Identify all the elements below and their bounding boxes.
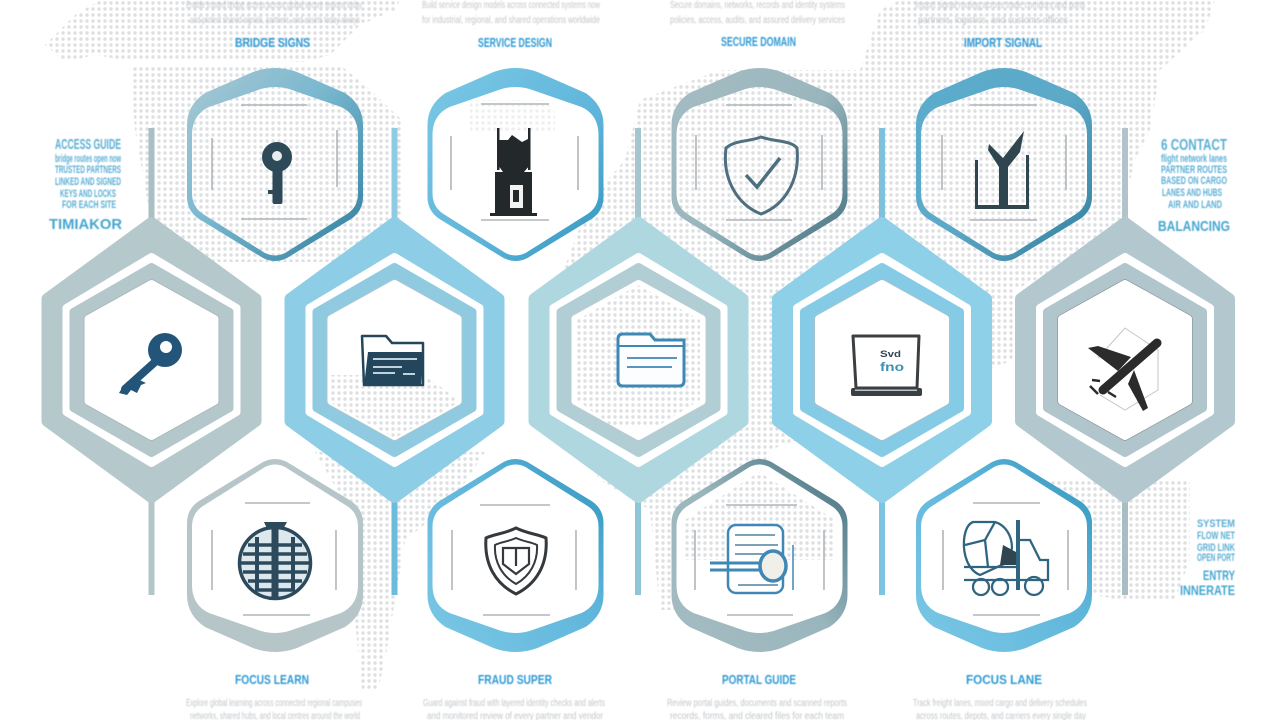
- right side text block: flight network lanes: [1161, 153, 1227, 165]
- icon: laptop: Svd: [880, 349, 901, 359]
- bottom headings: PORTAL GUIDE: [722, 672, 796, 687]
- panel: top hexagon 1 key: [187, 68, 363, 261]
- bottom headings: FOCUS LEARN: [235, 672, 309, 687]
- bottom description text columns: Track freight lanes, mixed cargo and delivery schedules: [913, 698, 1087, 709]
- left side text block: TIMIAKOR: [49, 216, 122, 233]
- panel: big hexagon 5 plane: [1021, 223, 1229, 497]
- bottom description text columns: Guard against fraud with layered identity checks and alerts: [423, 698, 605, 709]
- bottom headings: [235, 672, 1042, 687]
- right side text block: BASED ON CARGO: [1161, 175, 1227, 187]
- left side text block: ACCESS GUIDE: [55, 136, 121, 153]
- panel: bottom hexagon 2 shield: [428, 459, 604, 652]
- right side text block: AIR AND LAND: [1168, 199, 1222, 211]
- icon: globe: [240, 522, 310, 598]
- connector stems: [148, 128, 1128, 595]
- bottom right text block: ENTRY: [1203, 567, 1235, 583]
- panel: bottom hexagon 4 mixer truck: [916, 459, 1092, 652]
- left side text block: LINKED AND SIGNED: [55, 176, 121, 188]
- left side text block: FOR EACH SITE: [62, 199, 116, 211]
- right side text block: PARTNER ROUTES: [1161, 164, 1227, 176]
- panel: top hexagon 4 signal: [916, 68, 1092, 261]
- top description text columns: [186, 0, 1085, 26]
- icon: mixer truck: [964, 520, 1048, 595]
- top description text columns: for industrial, regional, and shared operations worldwide: [422, 15, 600, 26]
- left side text block: TRUSTED PARTNERS: [55, 164, 121, 176]
- icon: airplane: [1088, 328, 1158, 411]
- icon: shield with check: [725, 137, 797, 214]
- bottom right text block: FLOW NET: [1197, 530, 1235, 542]
- top description text columns: policies, access, audits, and assured delivery services: [670, 15, 845, 26]
- top headings: SERVICE DESIGN: [478, 35, 552, 50]
- icon: laptop: [851, 336, 922, 396]
- top headings: [235, 34, 1042, 50]
- left side text block: [49, 136, 122, 233]
- icon: Y antenna in bracket: [975, 131, 1029, 209]
- bottom right text block: GRID LINK: [1197, 542, 1235, 554]
- bottom right text block: INNERATE: [1180, 582, 1235, 598]
- bottom description text columns: Explore global learning across connected regional campuses: [186, 698, 362, 709]
- right side text block: LANES AND HUBS: [1162, 187, 1222, 199]
- icon: layered shield: [486, 528, 546, 594]
- panel: big hexagon 3 folder outline: [534, 223, 742, 497]
- bottom right text block: [1180, 518, 1235, 598]
- right side text block: [1158, 137, 1230, 235]
- bottom description text columns: [186, 698, 1087, 720]
- top headings: SECURE DOMAIN: [721, 34, 796, 49]
- panel: top hexagon 3 shield check: [672, 68, 848, 261]
- top description text columns: Secure domains, networks, records and identity systems: [670, 0, 845, 11]
- right side text block: 6 CONTACT: [1161, 137, 1227, 154]
- top headings: IMPORT SIGNAL: [964, 35, 1042, 50]
- top description text columns: and protect shared signals, partners, and assets today always: [190, 15, 360, 26]
- icon: laptop: fno: [880, 360, 904, 374]
- bottom description text columns: Review portal guides, documents and scanned reports: [667, 698, 847, 709]
- left side text block: bridge routes open now: [55, 153, 121, 165]
- top headings: BRIDGE SIGNS: [235, 35, 310, 50]
- panel: bottom hexagon 3 document search: [672, 459, 848, 652]
- top description text columns: Enable trusted bridge access across global secure regions today: [186, 0, 362, 11]
- icon: outlined folder: [618, 334, 684, 386]
- bottom right text block: OPEN PORT: [1197, 552, 1235, 564]
- panel: big hexagon 1 key: [48, 223, 256, 497]
- top description text columns: Import signal routing across trade corridors and ports: [915, 0, 1085, 11]
- top description text columns: Build service design models across connected systems now: [422, 0, 601, 11]
- right side text block: BALANCING: [1158, 218, 1230, 235]
- left side text block: KEYS AND LOCKS: [60, 188, 116, 200]
- top description text columns: partners, logistics, and customs offices: [918, 15, 1068, 26]
- panel: bottom hexagon 1 globe: [187, 459, 363, 652]
- icon: industrial machine: [490, 128, 537, 216]
- icon: document with magnifier: [710, 525, 793, 593]
- icon: keyhole key: [262, 142, 292, 204]
- bottom right text block: SYSTEM: [1197, 518, 1235, 530]
- icon: diagonal key: [119, 333, 182, 395]
- bottom headings: FRAUD SUPER: [478, 672, 552, 687]
- panel: big hexagon 4 laptop: [778, 223, 986, 497]
- panel: top hexagon 2 machine: [428, 68, 604, 261]
- bottom headings: FOCUS LANE: [966, 672, 1042, 687]
- panel: big hexagon 2 folder: [290, 223, 498, 497]
- icon: dark folder: [362, 336, 424, 386]
